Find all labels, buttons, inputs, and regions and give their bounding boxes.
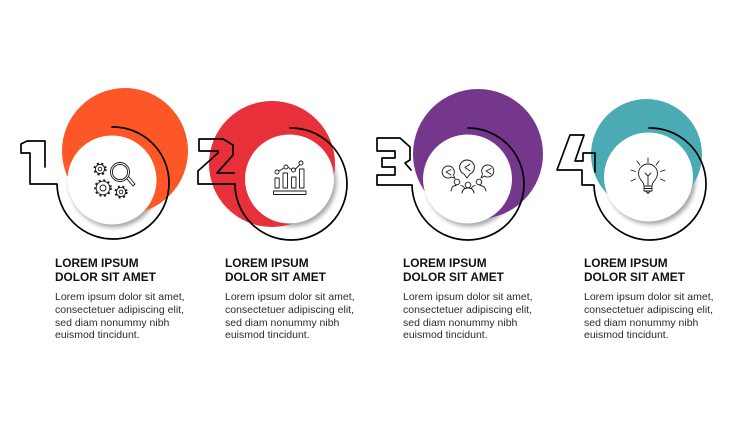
text block 1: DOLOR SIT AMET	[55, 270, 157, 284]
text block 3: sed diam nonummy nibh	[403, 317, 518, 329]
text block 2	[225, 256, 355, 341]
text block 1: sed diam nonummy nibh	[55, 317, 170, 329]
disc shadow 1	[70, 138, 158, 228]
text block 2: consectetuer adipiscing elit,	[225, 304, 354, 316]
text block 1: consectetuer adipiscing elit,	[55, 304, 184, 316]
white disc 3	[423, 134, 512, 224]
text block 4: euismod tincidunt.	[584, 329, 669, 341]
disc shadow 2	[248, 138, 336, 226]
coloured circle 4	[591, 99, 702, 210]
text block 4: LOREM IPSUM	[584, 256, 668, 270]
white disc 2	[245, 134, 334, 224]
text block 3: consectetuer adipiscing elit,	[403, 304, 532, 316]
text block 1: euismod tincidunt.	[55, 329, 140, 341]
icon: light bulb	[631, 158, 665, 194]
icon: gears and magnifier	[94, 162, 135, 198]
text block 3	[403, 256, 533, 341]
text block 3: euismod tincidunt.	[403, 329, 488, 341]
text block 2: LOREM IPSUM	[225, 256, 309, 270]
number 4 outline with ring	[557, 128, 706, 240]
text block 4: Lorem ipsum dolor sit amet,	[584, 291, 714, 303]
disc shadow 3	[426, 138, 514, 226]
white disc 1	[68, 136, 156, 224]
number 3 outline with ring	[377, 128, 524, 240]
text block 4	[584, 256, 714, 341]
disc shadow 4	[606, 136, 696, 224]
panel: step 3	[377, 89, 543, 240]
text block 4: DOLOR SIT AMET	[584, 270, 686, 284]
panel: step 1	[21, 88, 188, 239]
text block 4: sed diam nonummy nibh	[584, 317, 699, 329]
text block 2: Lorem ipsum dolor sit amet,	[225, 291, 355, 303]
text block 3: DOLOR SIT AMET	[403, 270, 505, 284]
coloured circle 3	[413, 89, 543, 219]
text block 1	[55, 256, 185, 341]
white disc 4	[604, 132, 693, 222]
panel: step 2	[198, 101, 347, 240]
panel: step 4	[557, 99, 706, 240]
icon: people sharing	[442, 160, 494, 193]
coloured circle 2	[209, 101, 335, 227]
text block 1: LOREM IPSUM	[55, 256, 139, 270]
text block 3: Lorem ipsum dolor sit amet,	[403, 291, 533, 303]
text block 2: DOLOR SIT AMET	[225, 270, 327, 284]
coloured circle 1	[62, 88, 188, 214]
text block 4: consectetuer adipiscing elit,	[584, 304, 713, 316]
text block 3: LOREM IPSUM	[403, 256, 487, 270]
number 1 outline with ring	[21, 127, 169, 239]
text block 2: euismod tincidunt.	[225, 329, 310, 341]
text block 1: Lorem ipsum dolor sit amet,	[55, 291, 185, 303]
number 2 outline with ring	[198, 128, 347, 240]
text block 2: sed diam nonummy nibh	[225, 317, 340, 329]
icon: bar chart	[274, 161, 306, 194]
